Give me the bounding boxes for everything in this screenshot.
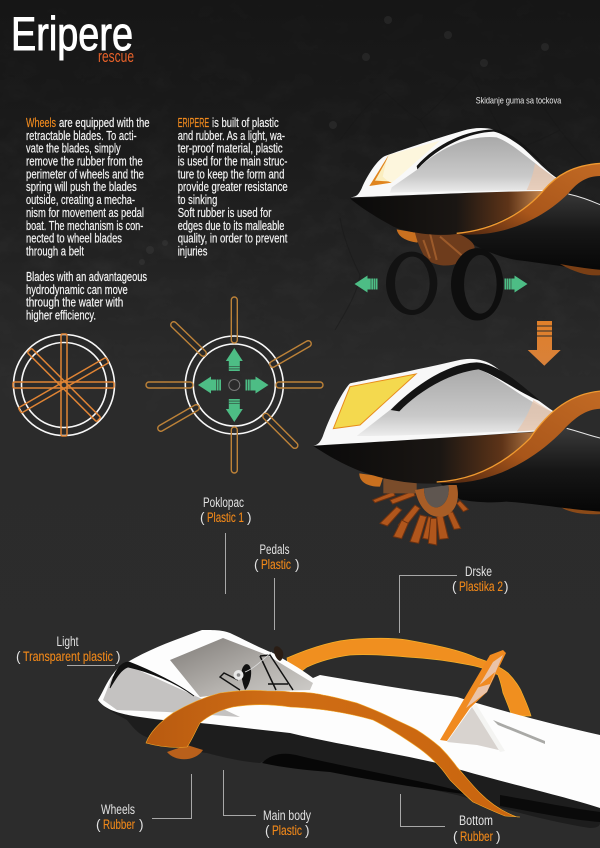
label: wheels: Wheels [101, 802, 135, 817]
label: drske: Drske [465, 564, 492, 579]
black arc trim [110, 662, 194, 696]
label: light: Light [56, 634, 79, 649]
label: pedals: Pedals [260, 542, 290, 557]
label: light [16, 634, 120, 666]
pedals [220, 646, 293, 690]
label: poklopac: Plastic 1 [207, 510, 244, 525]
label: drske: ) [504, 579, 508, 594]
label: poklopac: Poklopac [203, 495, 244, 510]
diagram: wheel with retracted blades [13, 334, 114, 436]
text block: wheels description: are equipped with the [59, 116, 150, 130]
text block: materials description: provide greater resistance [178, 180, 288, 194]
text block: materials description: ERIPERE [178, 116, 209, 130]
label: wheels: ) [139, 817, 144, 832]
label: wheels: Rubber [103, 817, 135, 832]
white deck [98, 630, 600, 808]
text block: wheels description: remove the rubber from the [26, 154, 143, 168]
label: drske: Plastika 2 [459, 579, 503, 594]
text block: wheels description: spring will push the blades [26, 180, 137, 194]
background [0, 0, 600, 330]
caption: removing tires: Skidanje guma sa tockova [476, 96, 562, 106]
icon: green arrow left of tire [354, 276, 378, 292]
label: bottom: ) [496, 829, 500, 844]
title: rescue [98, 47, 134, 66]
text block: wheels description: nected to wheel blades [26, 232, 122, 246]
icon: green arrow right of tire [504, 276, 528, 292]
label: main body: Plastic [272, 823, 302, 838]
icon: green arrow right [246, 376, 268, 394]
text block: wheels description: hydrodynamic can move [26, 283, 128, 297]
label: pedals [254, 542, 300, 630]
text block: wheels description: perimeter of wheels and the [26, 167, 144, 181]
text block: wheels description: retractable blades. To acti- [26, 129, 137, 143]
label: bottom [400, 794, 500, 844]
label: pedals: Plastic [261, 557, 291, 572]
text block: wheels description: boat. The mechanism is con- [26, 219, 143, 233]
label: main body: ) [305, 823, 310, 838]
label: bottom: Rubber [460, 829, 493, 844]
front handle arc [146, 690, 520, 817]
label: poklopac: ) [247, 510, 252, 525]
label: wheels: ( [96, 817, 101, 832]
black hull [100, 700, 600, 828]
label: pedals: ( [254, 557, 259, 572]
text block: materials description: is used for the main struc- [178, 154, 287, 168]
label: wheels [96, 774, 192, 832]
title: Eripere [11, 7, 133, 60]
text block: wheels description: nism for movement as pedal [26, 206, 144, 220]
label: light: ( [16, 649, 21, 664]
text block: wheels description: Wheels [26, 116, 56, 130]
text block: materials description: to sinking [178, 193, 217, 207]
cockpit opening [170, 638, 313, 697]
text block: wheels description: through the water with [26, 296, 123, 310]
label: poklopac: ( [200, 510, 205, 525]
illustration: boat with tires removed [350, 128, 600, 321]
label: poklopac [200, 495, 252, 594]
label: drske: ( [452, 579, 457, 594]
label: main body: Main body [263, 808, 311, 823]
grey cockpit front panel [103, 665, 240, 717]
text block: materials description: quality, in order to prevent [178, 232, 288, 246]
text block: wheels description: vate the blades, simply [26, 142, 121, 156]
text block: wheels description: higher efficiency. [26, 308, 96, 322]
text block: materials description: injuries [178, 244, 207, 258]
icon: orange down arrow [528, 321, 561, 366]
label: bottom: ( [453, 829, 458, 844]
text block: wheels description [26, 116, 150, 322]
icon: green arrow up [226, 348, 243, 371]
label: bottom: Bottom [459, 813, 493, 828]
label: pedals: ) [295, 557, 300, 572]
text block: materials description: and rubber. As a light, wa- [178, 129, 285, 143]
text block: materials description: ter-proof material, plastic [178, 142, 283, 156]
text block: materials description: edges due to its malleable [178, 219, 284, 233]
front wheel [167, 745, 203, 759]
diagram: wheel with extended blades [146, 297, 323, 473]
icon: green arrow down [226, 399, 243, 422]
label: light: Transparent plastic [23, 649, 113, 664]
icon: green arrow left [198, 376, 221, 394]
rear handle arc [287, 638, 531, 716]
label: light: ) [116, 649, 120, 664]
illustration: main boat side view [98, 630, 600, 828]
text block: materials description: is built of plastic [212, 116, 279, 130]
text block: materials description: Soft rubber is used for [178, 206, 271, 220]
text block: materials description: ture to keep the form and [178, 167, 284, 181]
text block: materials description [178, 116, 288, 258]
text block: wheels description: outside, creating a mecha- [26, 193, 135, 207]
label: main body [224, 770, 311, 838]
text block: wheels description: Blades with an advantageous [26, 270, 147, 284]
illustration: boat with blades extended [313, 359, 600, 545]
label: drske [400, 564, 508, 633]
label: main body: ( [265, 823, 270, 838]
text block: wheels description: through a belt [26, 244, 84, 258]
rear fin [440, 650, 545, 752]
